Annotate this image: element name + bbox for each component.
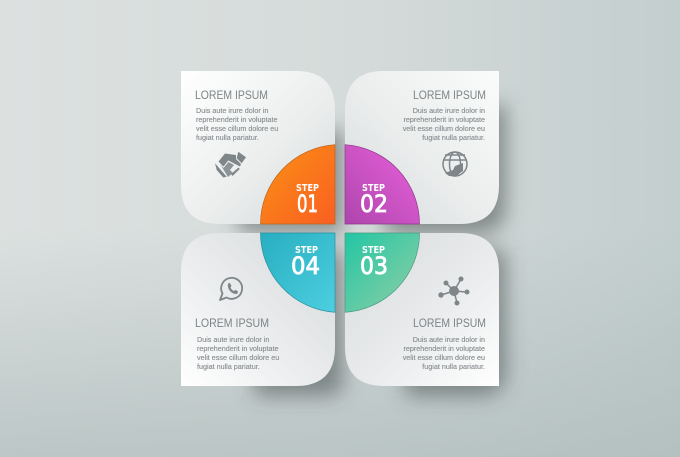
card shadows bbox=[225, 105, 506, 396]
step 03 label: STEP bbox=[362, 245, 385, 256]
text block 02 bbox=[403, 106, 485, 142]
text block 03: Duis aute irure dolor in bbox=[413, 335, 485, 344]
step 01 label: STEP bbox=[296, 183, 319, 194]
text block 02: velit esse cillum dolore eu bbox=[403, 124, 485, 133]
panel: step 03 bbox=[345, 233, 499, 386]
panel: step 04 bbox=[181, 233, 335, 386]
text block 03: velit esse cillum dolore eu bbox=[403, 353, 485, 362]
text block 03: reprehenderit in voluptate bbox=[403, 344, 485, 353]
step 03 quarter circle bbox=[345, 233, 420, 312]
icon: handshake bbox=[215, 152, 246, 178]
step 01 label bbox=[296, 183, 319, 218]
card 04 bbox=[181, 233, 335, 386]
icon: globe with hand bbox=[443, 152, 467, 176]
text block 04: fugiat nulla pariatur. bbox=[197, 362, 260, 371]
card 02 bbox=[345, 71, 499, 224]
text block 02: reprehenderit in voluptate bbox=[403, 115, 485, 124]
panel: step 01 bbox=[181, 71, 335, 224]
step 04 label: STEP bbox=[295, 245, 318, 256]
panel: step 02 bbox=[345, 71, 499, 224]
card 03 bbox=[345, 233, 499, 386]
card 01 bbox=[181, 71, 335, 224]
heading 04: LOREM IPSUM bbox=[195, 318, 269, 330]
text block 01 bbox=[196, 106, 278, 142]
text block 04: Duis aute irure dolor in bbox=[197, 335, 269, 344]
text block 04: reprehenderit in voluptate bbox=[197, 344, 279, 353]
heading 01: LOREM IPSUM bbox=[195, 90, 268, 102]
step 01 quarter circle bbox=[260, 145, 335, 224]
text block 02: Duis aute irure dolor in bbox=[413, 106, 485, 115]
text block 01: Duis aute irure dolor in bbox=[196, 106, 268, 115]
text block 01: fugiat nulla pariatur. bbox=[196, 133, 259, 142]
step 04 quarter circle bbox=[260, 233, 335, 312]
text block 02: fugiat nulla pariatur. bbox=[422, 133, 485, 142]
text block 03: fugiat nulla pariatur. bbox=[422, 362, 485, 371]
text block 03 bbox=[403, 335, 485, 371]
icon: whatsapp bbox=[220, 278, 242, 300]
step 04 label: 04 bbox=[291, 252, 320, 280]
step 02 label: 02 bbox=[360, 190, 388, 218]
step 03 label: 03 bbox=[360, 252, 388, 280]
step 01 label: 01 bbox=[297, 190, 318, 218]
text block 04: velit esse cillum dolore eu bbox=[197, 353, 279, 362]
heading 03: LOREM IPSUM bbox=[413, 318, 486, 330]
text block 01: reprehenderit in voluptate bbox=[196, 115, 278, 124]
step 02 quarter circle bbox=[345, 145, 420, 224]
heading 02: LOREM IPSUM bbox=[413, 90, 486, 102]
text block 04 bbox=[197, 335, 279, 371]
text block 01: velit esse cillum dolore eu bbox=[196, 124, 278, 133]
step 02 label: STEP bbox=[362, 183, 385, 194]
icon: network bbox=[438, 276, 470, 306]
